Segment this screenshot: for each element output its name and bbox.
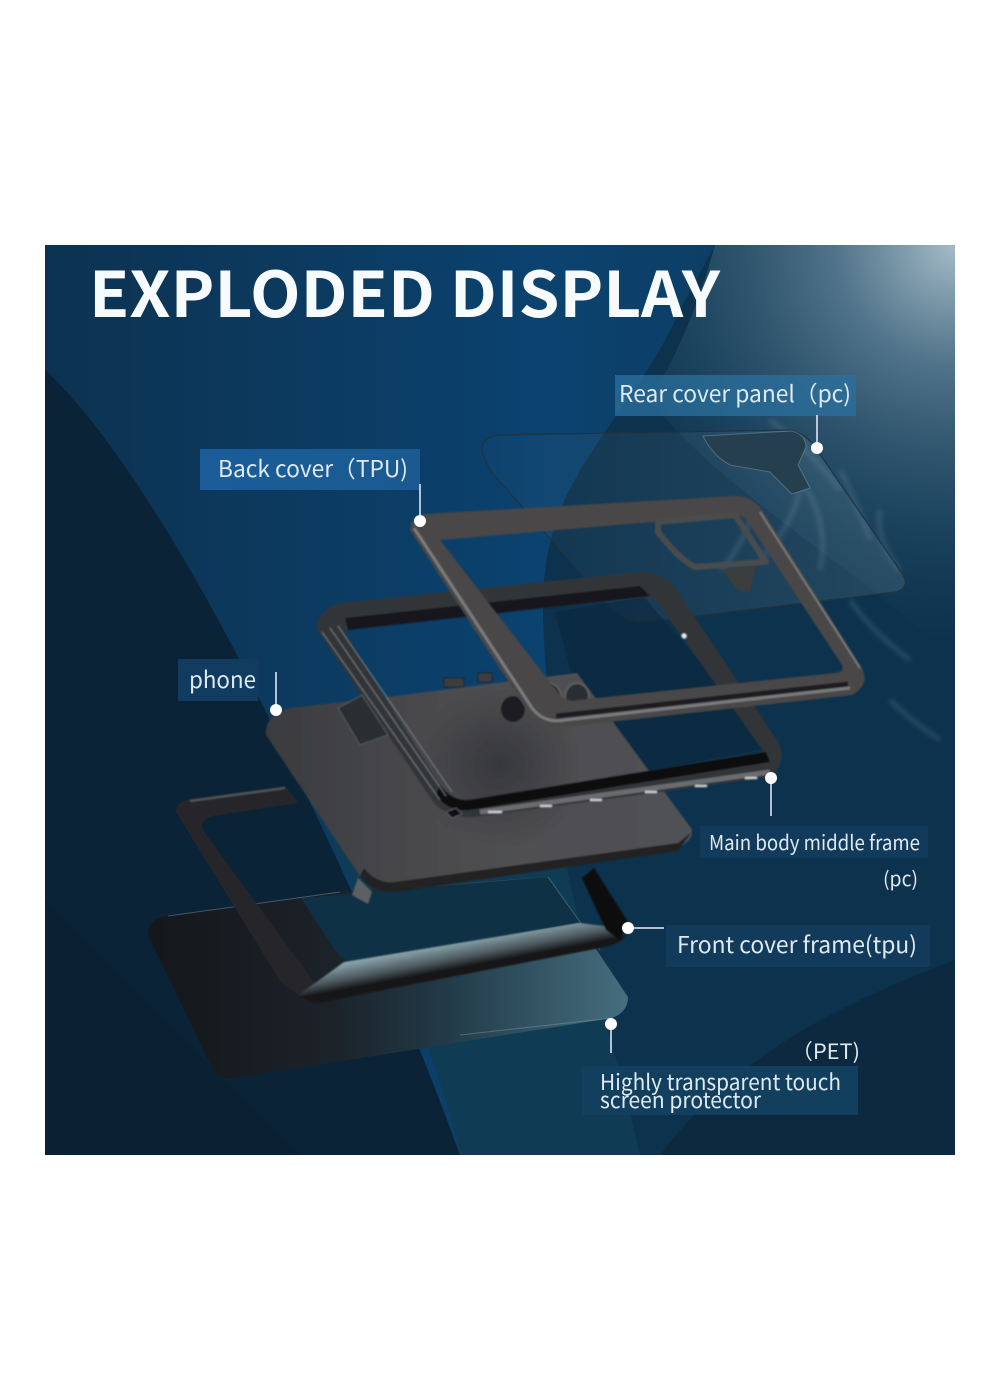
main body middle frame: window xyxy=(555,597,774,780)
camera ring on back cover xyxy=(658,515,766,567)
panel: ocean rock background xyxy=(45,245,955,1155)
back cover frame xyxy=(410,496,864,727)
front frame bottom band xyxy=(300,923,626,1002)
water streaks xyxy=(720,420,940,740)
label: phone: phone xyxy=(189,661,256,695)
label: phone xyxy=(178,659,282,716)
title: EXPLODED DISPLAY xyxy=(89,245,720,336)
touch screen protector xyxy=(148,877,628,1079)
front frame left edge xyxy=(176,786,316,996)
label: screen protector: （PET) xyxy=(791,1036,860,1066)
label: front cover frame: Front cover frame(tpu) xyxy=(677,926,917,960)
label: screen protector: screen protector xyxy=(600,1083,761,1115)
rear cover panel xyxy=(482,430,905,622)
label: rear cover panel xyxy=(615,375,856,454)
frame latch xyxy=(338,695,388,745)
camera cutout xyxy=(703,431,810,494)
label: main body middle frame: Main body middle frame xyxy=(709,826,920,856)
front frame right edge xyxy=(582,868,628,940)
phone camera xyxy=(501,696,525,722)
frame pin xyxy=(682,634,686,638)
front cover frame xyxy=(176,786,628,1002)
label: rear cover panel: Rear cover panel（pc) xyxy=(619,375,851,409)
label: main body middle frame xyxy=(700,772,928,892)
label: screen protector: Highly transparent touch xyxy=(600,1065,841,1097)
frame top dark slots xyxy=(345,586,650,630)
label: back cover xyxy=(200,449,426,527)
label: screen protector xyxy=(582,1018,860,1115)
phone buttons xyxy=(444,670,527,687)
phone xyxy=(266,670,692,904)
label: main body middle frame: (pc) xyxy=(883,863,918,892)
label: back cover: Back cover（TPU) xyxy=(218,450,408,484)
label: front cover frame xyxy=(622,922,930,967)
main body middle frame xyxy=(316,572,782,818)
